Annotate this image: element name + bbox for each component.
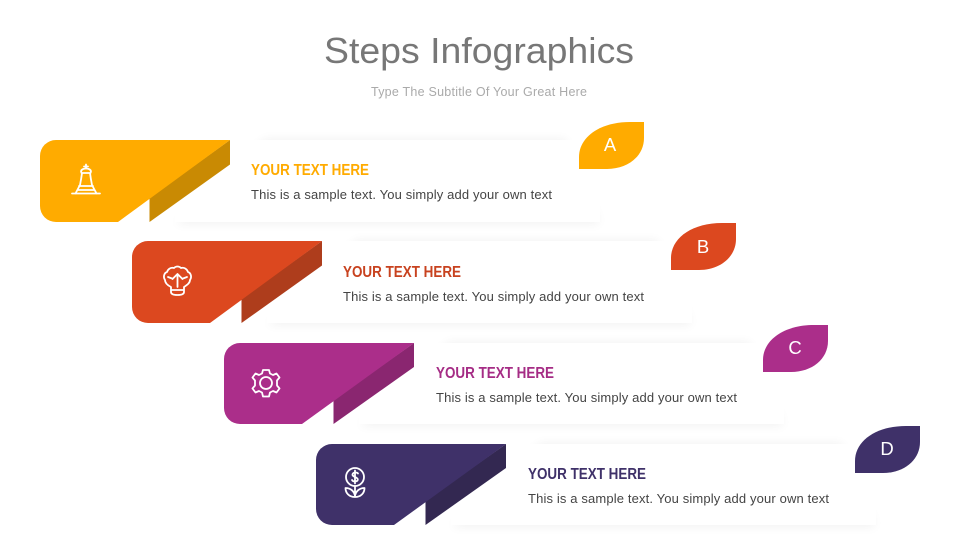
icon: money flower: [346, 468, 364, 497]
card shadow D: [451, 443, 876, 527]
card A: [175, 140, 600, 222]
card shadow A: [175, 139, 600, 224]
body text B: This is a sample text. You simply add your own text: [343, 289, 644, 304]
badge letter D: D: [880, 438, 894, 459]
ribbon B: [132, 241, 322, 323]
ribbon C: [224, 343, 414, 424]
body text C: This is a sample text. You simply add your own text: [436, 390, 737, 405]
ribbon fold B: [242, 241, 322, 323]
ribbon D: [316, 444, 506, 525]
ribbon A: [40, 140, 230, 222]
ribbon fold A: [150, 140, 230, 222]
title: Steps Infographics: [324, 30, 634, 71]
icon: chess king: [72, 164, 100, 194]
badge letter B: B: [697, 236, 709, 257]
badge letter A: A: [604, 134, 617, 155]
badge D: [855, 426, 920, 473]
body text D: This is a sample text. You simply add your own text: [528, 491, 829, 506]
ribbon fold D: [426, 444, 506, 525]
icon: gear: [252, 370, 280, 396]
card D: [451, 444, 876, 525]
step D: [316, 426, 920, 527]
badge B: [671, 223, 736, 270]
card shadow C: [359, 342, 784, 426]
step A: [40, 122, 644, 224]
card C: [359, 343, 784, 424]
subtitle: Type The Subtitle Of Your Great Here: [371, 85, 587, 99]
ribbon fold C: [334, 343, 414, 424]
step C: [224, 325, 828, 426]
badge A: [579, 122, 644, 169]
card shadow B: [267, 240, 692, 325]
heading C: YOUR TEXT HERE: [436, 365, 554, 382]
body text A: This is a sample text. You simply add your own text: [251, 187, 552, 202]
badge letter C: C: [788, 337, 802, 358]
heading A: YOUR TEXT HERE: [251, 162, 369, 179]
heading D: YOUR TEXT HERE: [528, 466, 646, 483]
heading B: YOUR TEXT HERE: [343, 264, 461, 281]
icon: brain bulb: [164, 266, 191, 295]
badge C: [763, 325, 828, 372]
step B: [132, 223, 736, 325]
card B: [267, 241, 692, 323]
